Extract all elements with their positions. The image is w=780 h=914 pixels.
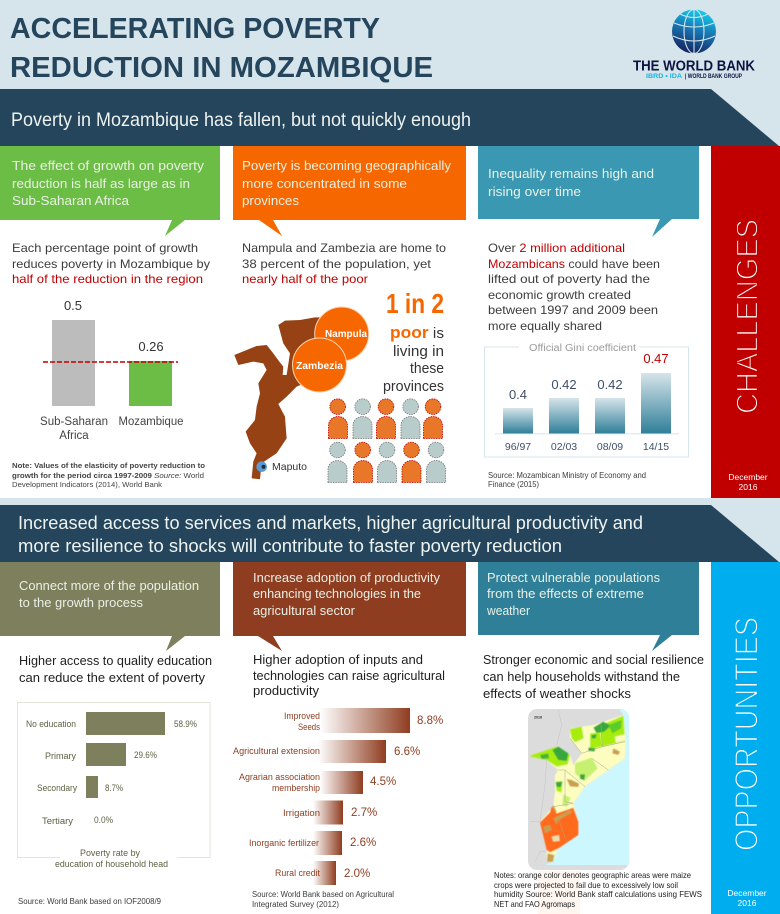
bar chart: poverty rate by education: Primary xyxy=(45,751,76,761)
notes: maize map: crops were projected to fail due to excessively low soil xyxy=(494,880,678,890)
panel: connect population callout: Connect more of the population xyxy=(19,578,199,593)
banner: challenges headline xyxy=(0,89,779,146)
logo: The World Bank: | WORLD BANK GROUP xyxy=(685,74,742,80)
bar chart: agricultural technologies: Improved xyxy=(284,711,320,721)
map: Mozambique provinces xyxy=(234,307,369,479)
banner: opportunities headline: Increased access to services and markets, higher agricultural productivity and xyxy=(18,513,643,533)
bar chart: Gini coefficient: 08/09 xyxy=(597,441,623,453)
callout: 1 in 2 poor xyxy=(383,288,444,395)
panel: productivity callout xyxy=(233,562,466,651)
notes: maize map xyxy=(494,870,702,909)
bar chart: Gini coefficient: 14/15 xyxy=(643,441,669,453)
map reflection xyxy=(538,871,580,914)
bar chart: Gini coefficient: 0.4 xyxy=(509,387,527,402)
icons: people pictogram xyxy=(328,399,446,482)
bar chart: growth elasticity xyxy=(40,298,184,442)
bar chart: Gini coefficient: 96/97 xyxy=(505,441,531,453)
text block: growth and poverty xyxy=(12,241,210,286)
header background xyxy=(0,0,780,146)
note: elasticity source xyxy=(12,461,205,489)
text block: resilience: Stronger economic and social resilience xyxy=(483,653,704,667)
bar chart: agricultural technologies: 6.6% xyxy=(394,746,420,758)
bar chart: agricultural technologies: 2.0% xyxy=(344,868,370,880)
panel: productivity callout: Increase adoption of productivity xyxy=(253,570,440,585)
bar chart: agricultural technologies: Agricultural extension xyxy=(233,746,320,756)
divider band xyxy=(0,498,780,562)
text block: provinces: 38 percent of the population, yet xyxy=(242,257,432,271)
bar chart: Gini coefficient: 02/03 xyxy=(551,441,577,453)
bar chart: poverty rate by education: 0.0% xyxy=(94,815,113,825)
bar chart: agricultural technologies: 2.7% xyxy=(351,807,377,819)
callout: 1 in 2 poor: these xyxy=(410,361,444,377)
bar chart: poverty rate by education: Tertiary xyxy=(42,816,74,826)
sidebar: challenges: CHALLENGES xyxy=(730,219,764,414)
bar chart: poverty rate by education: education of household head xyxy=(55,859,168,869)
title: REDUCTION IN MOZAMBIQUE xyxy=(10,52,433,84)
bar chart: Gini coefficient xyxy=(484,343,688,457)
map: projected maize crop failure xyxy=(528,708,632,870)
banner: challenges headline: Poverty in Mozambique has fallen, but not quickly enough xyxy=(11,109,471,131)
bar chart: poverty rate by education: 29.6% xyxy=(134,750,157,760)
bar chart: poverty rate by education: Poverty rate by xyxy=(80,848,140,858)
note: elasticity source: Note: Values of the elasticity of poverty reduction to xyxy=(12,461,205,470)
note: elasticity source: growth for the period circa 1997-2009 Source: World xyxy=(12,471,204,480)
text block: education: can reduce the extent of poverty xyxy=(19,671,206,685)
text block: provinces: Nampula and Zambezia are home to xyxy=(242,241,446,255)
panel: geographic concentration callout xyxy=(233,146,466,236)
source: Gini: Finance (2015) xyxy=(488,480,539,489)
bar chart: Gini coefficient: 0.42 xyxy=(551,377,577,392)
notes: maize map: humidity Source: World Bank staff calculations using FEWS xyxy=(494,889,702,899)
bar chart: growth elasticity: Africa xyxy=(59,430,89,442)
panel: geographic concentration callout: Poverty is becoming geographically xyxy=(242,158,452,173)
panel: growth effect callout: The effect of growth on poverty xyxy=(12,158,205,173)
text block: agricultural inputs: technologies can raise agricultural xyxy=(253,669,445,683)
title xyxy=(10,13,433,84)
logo: The World Bank: THE WORLD BANK xyxy=(633,58,755,74)
map: projected maize crop failure: 2016 xyxy=(534,715,542,719)
bar chart: growth elasticity: 0.5 xyxy=(64,298,82,313)
logo: The World Bank xyxy=(633,10,755,80)
source: Gini xyxy=(488,471,646,489)
bar chart: agricultural technologies: 2.6% xyxy=(350,837,376,849)
source: agriculture xyxy=(252,890,394,909)
text block: inequality: Over 2 million additional xyxy=(488,241,625,255)
panel: inequality callout: Inequality remains high and xyxy=(488,166,654,181)
source: agriculture: Source: World Bank based on Agricultural xyxy=(252,890,394,899)
map: Mozambique provinces: Zambezia xyxy=(296,360,343,372)
bar chart: Gini coefficient: Official Gini coefficient xyxy=(529,343,636,354)
callout: 1 in 2 poor: provinces xyxy=(383,379,444,395)
bar chart: poverty rate by education: 8.7% xyxy=(105,783,123,793)
logo: The World Bank: IBRD • IDA xyxy=(646,74,683,80)
panel: geographic concentration callout: provinces xyxy=(242,193,300,208)
panel: vulnerable populations callout: from the effects of extreme xyxy=(487,586,644,601)
bar chart: agricultural technologies: Rural credit xyxy=(275,868,320,878)
text block: growth and poverty: reduces poverty in Mozambique by xyxy=(12,257,210,271)
panel: productivity callout: enhancing technologies in the xyxy=(253,586,421,601)
bar chart: agricultural technologies: Inorganic fertilizer xyxy=(249,838,319,848)
bar chart: Gini coefficient: 0.47 xyxy=(643,351,669,366)
text block: agricultural inputs xyxy=(253,653,445,698)
bar chart: poverty rate by education: 58.9% xyxy=(174,719,197,729)
source: education: Source: World Bank based on IOF2008/9 xyxy=(18,897,162,906)
map: Mozambique provinces: Maputo xyxy=(272,461,307,473)
text block: education xyxy=(19,654,212,685)
callout: 1 in 2 poor: poor is xyxy=(390,323,444,342)
text block: provinces: nearly half of the poor xyxy=(242,272,368,286)
panel: vulnerable populations callout xyxy=(478,562,699,651)
text block: education: Higher access to quality education xyxy=(19,654,212,668)
sidebar: opportunities: OPPORTUNITIES xyxy=(728,617,764,851)
bar chart: poverty rate by education xyxy=(18,702,210,869)
bar chart: Gini coefficient: 0.42 xyxy=(597,377,623,392)
text block: agricultural inputs: productivity xyxy=(253,684,320,698)
text block: inequality: between 1997 and 2009 been xyxy=(488,303,658,317)
bar chart: agricultural technologies: membership xyxy=(272,783,320,793)
text block: agricultural inputs: Higher adoption of inputs and xyxy=(253,653,423,667)
text block: resilience: effects of weather shocks xyxy=(483,687,631,701)
notes: maize map: NET and FAO Agromaps xyxy=(494,899,575,909)
text block: inequality xyxy=(488,241,660,333)
banner: opportunities headline xyxy=(0,505,779,562)
bar chart: poverty rate by education: No education xyxy=(26,719,76,729)
text block: inequality: economic growth created xyxy=(488,288,631,302)
text block: inequality: Mozambicans could have been xyxy=(488,257,660,271)
bar chart: agricultural technologies xyxy=(233,708,443,885)
map: Mozambique provinces: Nampula xyxy=(325,328,367,340)
panel: inequality callout xyxy=(478,146,699,237)
text block: resilience: can help households withstand the xyxy=(483,670,680,684)
panel: vulnerable populations callout: weather xyxy=(486,603,531,618)
text block: growth and poverty: Each percentage point of growth xyxy=(12,241,198,255)
panel: inequality callout: rising over time xyxy=(488,184,581,199)
panel: productivity callout: agricultural sector xyxy=(253,603,356,618)
sidebar: challenges xyxy=(711,146,780,498)
panel: geographic concentration callout: more concentrated in some xyxy=(242,176,407,191)
sidebar: opportunities: December xyxy=(727,888,767,898)
panel: growth effect callout: Sub-Saharan Africa xyxy=(12,193,130,208)
note: elasticity source: Development Indicators (2014), World Bank xyxy=(12,480,162,489)
bar chart: agricultural technologies: Irrigation xyxy=(283,808,320,818)
bar chart: agricultural technologies: 4.5% xyxy=(370,776,396,788)
title: ACCELERATING POVERTY xyxy=(10,13,380,45)
text block: inequality: lifted out of poverty had the xyxy=(488,272,650,286)
text block: growth and poverty: half of the reduction in the region xyxy=(12,272,203,286)
source: agriculture: Integrated Survey (2012) xyxy=(252,900,339,909)
source: Gini: Source: Mozambican Ministry of Economy and xyxy=(488,471,646,480)
sidebar: challenges: 2016 xyxy=(739,482,758,492)
notes: maize map: Notes: orange color denotes geographic areas were maize xyxy=(494,870,691,880)
panel: connect population callout xyxy=(0,562,220,651)
callout: 1 in 2 poor: 1 in 2 xyxy=(386,288,444,319)
bar chart: agricultural technologies: Seeds xyxy=(298,722,320,732)
banner: opportunities headline: more resilience to shocks will contribute to faster poverty reduction xyxy=(18,536,562,556)
panel: vulnerable populations callout: Protect vulnerable populations xyxy=(487,570,660,585)
bar chart: growth elasticity: Mozambique xyxy=(118,416,184,428)
sidebar: opportunities xyxy=(711,562,780,914)
bar chart: growth elasticity: Sub-Saharan xyxy=(40,416,108,428)
sidebar: challenges: December xyxy=(728,472,768,482)
text block: resilience xyxy=(483,653,704,701)
bar chart: poverty rate by education: Secondary xyxy=(37,783,77,793)
text block: provinces xyxy=(242,241,446,286)
bar chart: growth elasticity: 0.26 xyxy=(138,339,164,354)
panel: growth effect callout: reduction is half as large as in xyxy=(12,176,190,191)
bar chart: agricultural technologies: Agrarian association xyxy=(239,772,320,782)
text block: inequality: more equally shared xyxy=(488,319,602,333)
callout: 1 in 2 poor: living in xyxy=(393,344,444,360)
sidebar: opportunities: 2016 xyxy=(738,898,757,908)
bar chart: agricultural technologies: 8.8% xyxy=(417,715,443,727)
panel: connect population callout: to the growth process xyxy=(19,595,143,610)
panel: growth effect callout xyxy=(0,146,220,236)
